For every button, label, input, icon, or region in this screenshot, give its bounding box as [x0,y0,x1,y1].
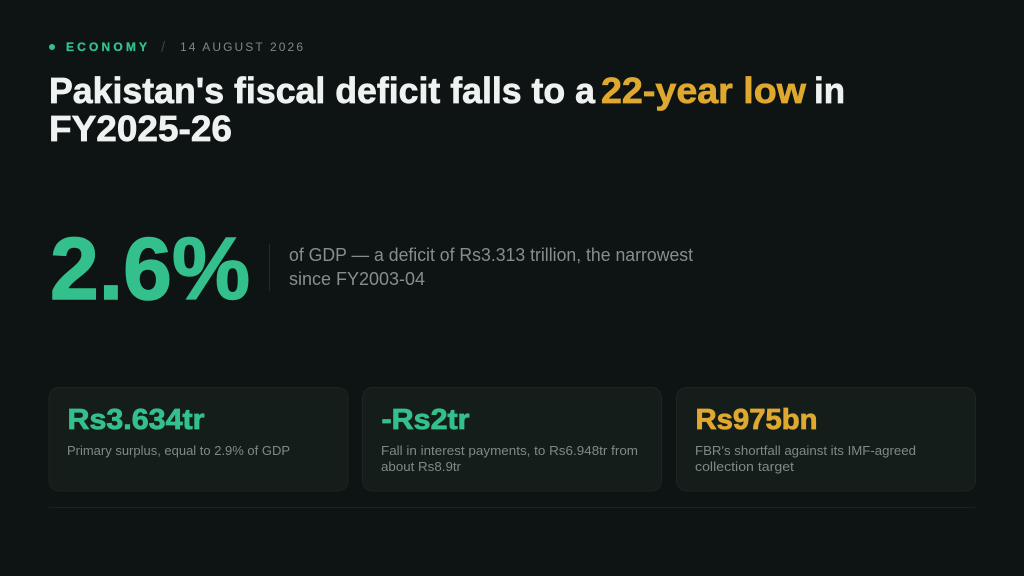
panel: primary surplus [49,388,348,491]
hero description [289,245,693,289]
separator slash: / [161,39,166,56]
description: Fall in interest payments, to Rs6.948tr from [381,443,638,458]
icon: green dot [49,44,55,50]
value: Rs975bn [696,404,818,436]
description: about Rs8.9tr [381,459,462,474]
description [695,443,916,474]
section label: ECONOMY [66,40,147,54]
kicker: section and date [49,39,303,56]
value: -Rs2tr [382,404,470,436]
hero description: since FY2003-04 [289,269,425,289]
title: FY2025-26 [49,108,232,149]
date: 14 AUGUST 2026 [180,40,303,54]
description: collection target [695,459,794,474]
panel: FBR shortfall [676,388,976,491]
title: Pakistan's fiscal deficit falls to a [49,70,596,111]
description: FBR's shortfall against its IMF-agreed [695,443,916,458]
hero description: of GDP — a deficit of Rs3.313 trillion, the narrowest [289,245,693,265]
value: Rs3.634tr [68,404,204,436]
panel: interest payments [362,388,662,491]
hero statistic: 2.6% [50,219,250,318]
title [49,70,845,149]
title highlight: 22-year low [601,70,807,111]
description: Primary surplus, equal to 2.9% of GDP [67,443,290,458]
description [381,443,638,474]
title: in [814,70,845,111]
